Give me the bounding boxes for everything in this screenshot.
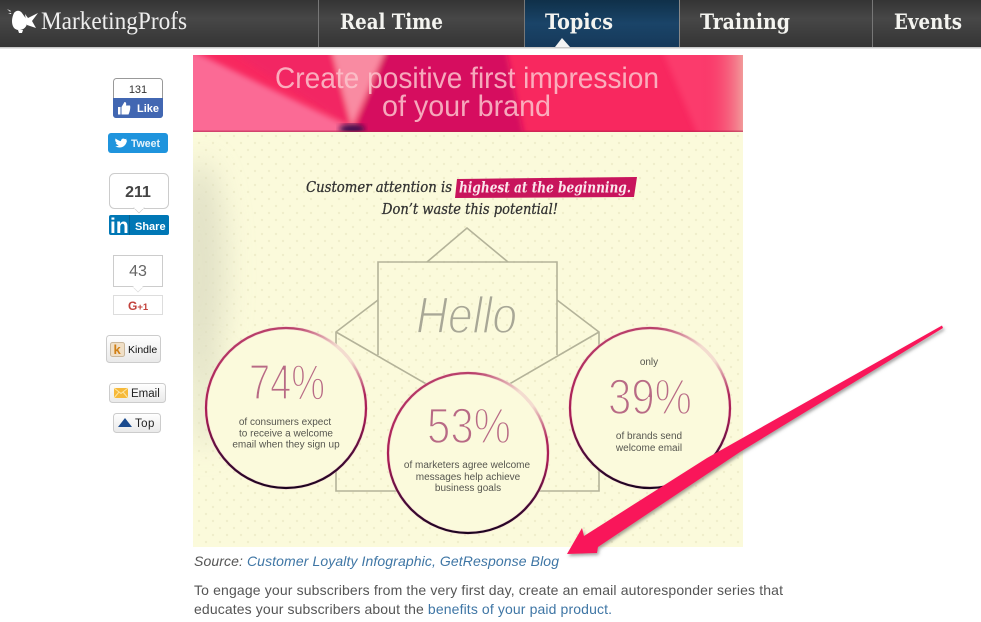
banner title (275, 62, 659, 123)
stat circle: 39% (569, 327, 731, 489)
paper background (174, 132, 743, 547)
stat circle: 39%: 39% (608, 369, 692, 425)
nav item: Real Time: Real Time (340, 9, 443, 34)
button: Tweet (108, 133, 168, 153)
button: Kindle (106, 336, 160, 362)
banner title: Create positive first impression (275, 62, 659, 95)
button: LinkedIn share: Share (135, 221, 166, 233)
button: LinkedIn share: in (110, 215, 129, 238)
social share sidebar (106, 78, 169, 432)
nav item: Topics (active): Topics (545, 9, 613, 34)
button: Kindle: Kindle (128, 344, 157, 356)
body paragraph (194, 582, 783, 617)
source line: Source: Customer Loyalty Infographic, GetResponse Blog (194, 553, 559, 569)
counter: LinkedIn 211: 211 (125, 184, 151, 201)
button: Top (114, 414, 160, 432)
nav item: Events (872, 0, 962, 47)
button: Facebook like: 131 (129, 84, 147, 96)
stat circle: 53%: 53% (427, 398, 511, 454)
stat circle: 53%: of marketers agree welcome (404, 460, 531, 471)
button: Google plus one: G+1 (128, 299, 149, 313)
stat circle: 53% (387, 372, 549, 534)
button: Facebook like: Like (137, 103, 159, 115)
nav item: Topics (active) (524, 0, 680, 47)
body paragraph: To engage your subscribers from the very first day, create an email autoresponder series that (194, 582, 783, 598)
headline: highest at the beginning. (459, 178, 631, 196)
Hello text: Hello (416, 287, 517, 345)
stat circle: 74%: of consumers expect (239, 417, 331, 428)
counter: Google plus 43: 43 (129, 263, 147, 280)
arrow pointing to source link (567, 326, 943, 554)
icon: bird logo (7, 9, 38, 33)
button: Tweet: Tweet (131, 138, 160, 150)
button: Email (110, 384, 166, 402)
envelope illustration (336, 228, 599, 491)
stat circle: 74%: 74% (249, 354, 325, 410)
counter: LinkedIn 211 (110, 174, 168, 213)
stat circle: 53%: messages help achieve (416, 472, 521, 483)
button: Facebook like (113, 78, 163, 118)
nav item: Training: Training (700, 9, 790, 34)
banner title: of your brand (382, 90, 551, 123)
pink banner (193, 55, 743, 132)
headline (306, 177, 637, 218)
body paragraph: educates your subscribers about the benefits of your paid product. (194, 601, 612, 617)
headline: Don’t waste this potential! (381, 200, 558, 218)
stat circle: 74%: to receive a welcome (239, 428, 333, 440)
button: LinkedIn share (109, 215, 169, 238)
button: Top: Top (135, 418, 155, 430)
stat circle: 39%: of brands send (616, 431, 682, 442)
button: Kindle: k (114, 342, 122, 357)
logo wordmark: MarketingProfs (41, 8, 187, 35)
button: Google plus one (114, 296, 162, 314)
stat circle: 74%: email when they sign up (232, 440, 340, 450)
headline: Customer attention is (306, 178, 452, 196)
nav item: Real Time (318, 0, 443, 47)
stat circle: 39%: welcome email (615, 443, 682, 454)
stat circle: 39%: only (640, 357, 658, 368)
top navigation bar (0, 0, 981, 48)
counter: Google plus 43 (114, 256, 162, 292)
stat circle: 53%: business goals (435, 483, 501, 494)
infographic image (174, 45, 760, 547)
button: Email: Email (131, 388, 160, 400)
nav item: Events: Events (894, 9, 962, 34)
stat circle: 74% (205, 327, 367, 489)
